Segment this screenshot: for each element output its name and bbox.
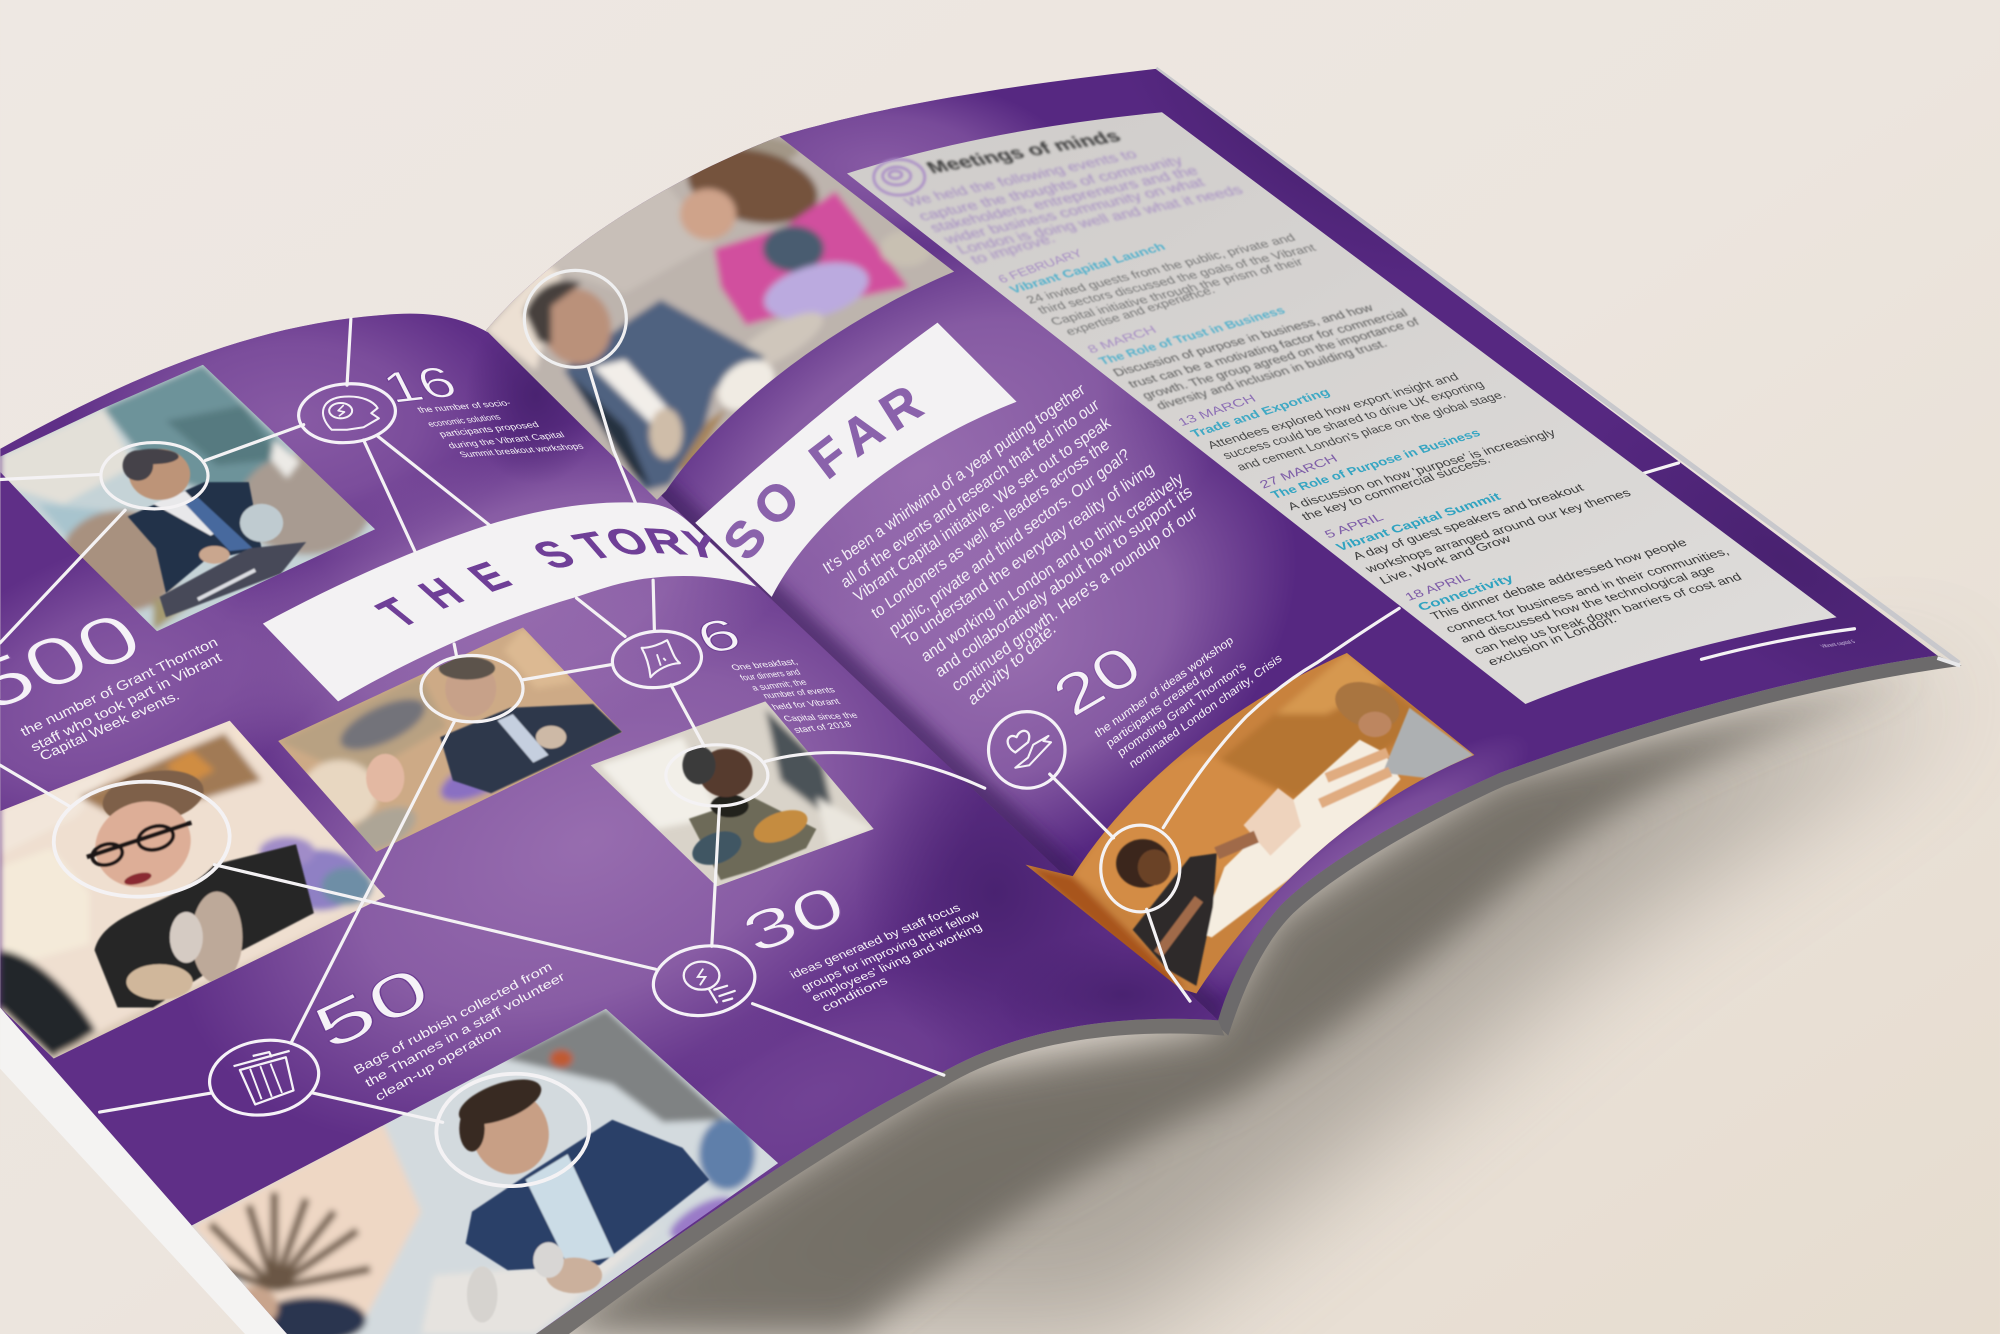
intro paragraph: public, private and third sectors. Our goal? — [886, 445, 1133, 639]
event: 6 February: 6 FEBRUARY — [996, 248, 1086, 286]
event: 5 April: Vibrant Capital Summit — [1334, 491, 1504, 554]
stat caption: groups for improving their fellow — [799, 908, 983, 994]
photo: man and blonde woman — [278, 628, 622, 852]
event: 13 March: success could be shared to drive UK exporting — [1220, 378, 1487, 462]
stat caption: promoting Grant Thornton's — [1115, 659, 1248, 759]
photo ring: man on top photo — [524, 270, 626, 367]
icon: trash can — [205, 1033, 324, 1122]
stat caption: a summit; the — [749, 677, 809, 693]
event: 5 April: A day of guest speakers and breakout — [1350, 481, 1586, 562]
event: 13 March — [1176, 371, 1509, 473]
stat: 30: 30 — [732, 873, 855, 965]
photo ring: man in navy suit — [433, 1070, 592, 1190]
banner: so far — [695, 322, 1016, 597]
stat caption: clean-up operation — [373, 1021, 503, 1104]
stat: 30 — [732, 873, 985, 1014]
stat: 16: 16 — [374, 358, 465, 412]
intro text: wider business community on what — [940, 175, 1208, 247]
event: 8 March: 8 MARCH — [1085, 324, 1160, 357]
intro paragraph: to Londoners as well as leaders across the — [868, 435, 1112, 623]
heading: so far: SO FAR — [726, 388, 926, 558]
event: 18 April: connect for business and in their communities, — [1443, 545, 1732, 635]
stat: 20 — [1040, 633, 1284, 771]
text: and collaboratively about how to support its — [932, 482, 1195, 681]
photo ring: woman in floral blouse — [666, 745, 768, 806]
stat caption — [1092, 633, 1284, 771]
stat caption — [351, 959, 567, 1104]
text: It's been a whirlwind of a year putting together — [820, 380, 1088, 578]
intro paragraph: activity to date. — [965, 619, 1059, 710]
stat: 50 — [302, 954, 567, 1104]
text: To understand the everyday reality of living — [899, 459, 1157, 651]
stat: 50: 50 — [302, 954, 442, 1063]
event: 8 March — [1085, 302, 1422, 412]
event: 6 February: expertise and experience. — [1063, 284, 1218, 338]
text: all of the events and research that fed into our — [837, 395, 1102, 592]
photo: man in navy suit — [179, 1001, 791, 1334]
intro text: We held the following events to — [901, 146, 1140, 210]
text: continued growth. Here's a roundup of our — [949, 502, 1200, 695]
stat: 16 — [374, 358, 586, 459]
text: and working in London and to think creatively — [918, 469, 1186, 666]
stat caption: economic solutions — [425, 412, 503, 429]
stat caption: Capital Week events. — [37, 689, 182, 764]
icon: heart in hand — [989, 712, 1065, 788]
event: 6 February: 24 invited guests from the public, private and — [1024, 232, 1298, 306]
stat caption — [415, 397, 586, 459]
right page — [486, 68, 1938, 1020]
photo ring: man with blue tie — [101, 443, 208, 509]
event: 8 March: diversity and inclusion in building trust. — [1153, 337, 1390, 412]
photo ring: man in centre photo — [421, 656, 523, 722]
event: 13 March: Attendees explored how export insight and — [1205, 371, 1462, 452]
event: 18 April: 18 APRIL — [1403, 571, 1474, 604]
event: 6 February: Vibrant Capital Launch — [1007, 240, 1168, 296]
panel: meetings of minds — [847, 112, 1837, 704]
event: 27 March: 27 MARCH — [1257, 453, 1341, 492]
stat caption: the number of Grant Thornton — [18, 634, 220, 739]
stat caption: held for Vibrant — [770, 696, 843, 712]
icon: head with lightning — [297, 381, 397, 446]
stat caption: nominated London charity, Crisis — [1127, 652, 1284, 771]
stat caption: four dinners and — [738, 667, 803, 683]
intro text: London is doing well and what it needs — [953, 183, 1246, 257]
event: 18 April: This dinner debate addressed how people — [1428, 536, 1690, 623]
stat: 6 — [688, 609, 860, 735]
event: 8 March: growth. The group agreed on the importance of — [1140, 316, 1422, 402]
footer page label: Vibrant capital 5 — [1819, 639, 1857, 649]
event: 13 March: 13 MARCH — [1176, 393, 1259, 429]
heading: Meetings of minds — [923, 127, 1125, 177]
stat caption: during the Vibrant Capital — [446, 430, 566, 450]
event: 6 February — [996, 232, 1319, 338]
book shadow — [542, 676, 1958, 1334]
event: 8 March: trust can be a motivating factor for commercial — [1126, 307, 1410, 390]
stat caption: the number of ideas workshop — [1092, 633, 1235, 740]
stat caption: employees' living and working — [809, 921, 985, 1004]
stat caption — [729, 657, 860, 735]
event: 27 March: A discussion on how 'purpose' is increasingly — [1285, 427, 1559, 513]
event: 6 February: third sectors discussed the goals of the Vibrant — [1035, 242, 1319, 316]
stat caption: Capital since the — [781, 710, 860, 723]
stat caption: participants created for — [1104, 664, 1217, 751]
icon: tag — [610, 628, 704, 691]
event: 27 March: The Role of Purpose in Business — [1268, 427, 1483, 501]
text: Vibrant Capital initiative. We set out to speak — [850, 412, 1114, 606]
photo ring: man at orange table — [1101, 825, 1180, 912]
stat: 20: 20 — [1040, 633, 1155, 728]
icon: head in ring — [874, 159, 925, 195]
stat caption: start of 2018 — [791, 719, 854, 735]
stat: 6: 6 — [688, 609, 750, 664]
intro text: capture the thoughts of community — [915, 153, 1186, 224]
heading: the story: THE STORY — [374, 528, 712, 626]
stat caption: number of events — [761, 685, 837, 701]
photo: men at orange table — [1020, 644, 1486, 1008]
page stack edge — [536, 69, 1962, 1334]
photo: woman with glasses — [0, 714, 395, 1071]
stat caption: Bags of rubbish collected from — [351, 959, 554, 1077]
event: 5 April: 5 APRIL — [1322, 511, 1387, 542]
event: 18 April: Connectivity — [1415, 572, 1516, 614]
photo: man and woman in pink — [478, 128, 963, 510]
stat caption: ideas generated by staff focus — [787, 901, 963, 981]
left page — [0, 281, 1275, 1334]
white book spine edge — [0, 1002, 287, 1334]
stat caption: the number of socio- — [415, 397, 513, 415]
event: 6 February: Capital initiative through the prism of their — [1048, 256, 1306, 328]
event: 8 March: The Role of Trust in Business — [1096, 305, 1288, 368]
intro text: to improve. — [967, 231, 1059, 267]
stat caption: conditions — [819, 974, 891, 1014]
stat caption — [18, 634, 224, 764]
event: 5 April: workshops arranged around our key themes — [1362, 487, 1634, 575]
event: 18 April: and discussed how the technological age — [1457, 563, 1718, 645]
event: 27 March: the key to commercial success. — [1299, 454, 1493, 523]
intro paragraph — [820, 380, 1200, 710]
intro text — [901, 146, 1246, 267]
photo: man with blue tie — [0, 357, 383, 638]
stat caption: the Thames in a staff volunteer — [363, 969, 567, 1090]
event: 18 April: exclusion in London. — [1485, 613, 1620, 668]
event: 18 April: can help us break down barriers of cost and — [1471, 571, 1745, 657]
intro text: stakeholders, entrepreneurs and the — [927, 164, 1202, 235]
stat caption: Summit breakout workshops — [457, 442, 586, 459]
stat caption: participants proposed — [437, 419, 541, 439]
stat: 500 — [0, 598, 224, 764]
stat caption: One breakfast, — [729, 657, 800, 672]
event: 18 April — [1403, 536, 1745, 668]
event: 5 April — [1322, 481, 1634, 587]
event: 13 March: Trade and Exporting — [1188, 385, 1333, 440]
panel background — [847, 112, 1837, 704]
photo ring: woman with glasses — [51, 777, 233, 901]
event: 8 March: Discussion of purpose in business, and how — [1110, 302, 1376, 379]
icon: bulb — [649, 940, 759, 1022]
event: 5 April: Live, Work and Grow — [1377, 532, 1515, 587]
banner: the story — [262, 502, 756, 702]
stat caption: staff who took part in Vibrant — [28, 649, 224, 755]
stat caption — [787, 901, 985, 1014]
connector lines — [0, 319, 1854, 1122]
event: 13 March: and cement London's place on the global stage. — [1234, 388, 1509, 473]
photo: woman with floral blouse — [587, 695, 880, 893]
